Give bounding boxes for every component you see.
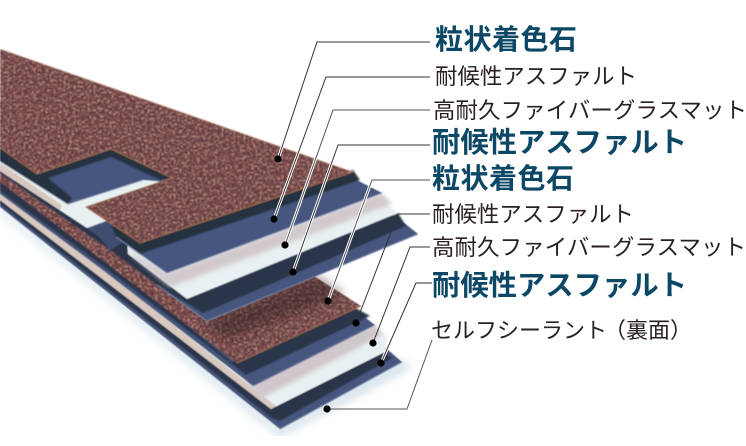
- leader line: asphalt 3: [352, 214, 430, 327]
- leader line: mineral granules 2: [324, 180, 430, 305]
- leader line: fiberglass mat 2: [369, 247, 430, 347]
- label: asphalt 4: 耐候性アスファルト: [432, 269, 687, 301]
- label: self sealant: セルフシーラント（裏面）: [431, 318, 692, 343]
- label: asphalt 3: 耐候性アスファルト: [432, 202, 634, 227]
- layer: lower asphalt: [0, 160, 375, 386]
- label: asphalt 2: 耐候性アスファルト: [432, 126, 687, 158]
- leader line: fiberglass mat 1: [281, 110, 430, 249]
- layer: upper asphalt 1: [0, 100, 382, 273]
- label: asphalt 1: 耐候性アスファルト: [435, 64, 637, 89]
- drop shadow: [0, 207, 412, 436]
- leader line: asphalt 2: [289, 145, 430, 276]
- layer: upper asphalt 2: [0, 100, 418, 321]
- label: fiberglass mat 1: 高耐久ファイバーグラスマット: [433, 98, 746, 123]
- roofing shingle layer stack: [0, 49, 418, 436]
- leader line: mineral granules 1: [274, 42, 430, 163]
- leader line: asphalt 1: [270, 77, 430, 223]
- layer: lower mineral granules: [0, 100, 361, 363]
- layer: top mineral granules: [0, 49, 353, 243]
- label: mineral granules 1: 粒状着色石: [435, 24, 577, 55]
- layer: upper fiberglass mat: [0, 100, 398, 299]
- leader line: asphalt 4: [377, 283, 432, 367]
- leader line: self sealant: [323, 340, 432, 413]
- layer: lower fiberglass mat: [0, 170, 387, 409]
- label: fiberglass mat 2: 高耐久ファイバーグラスマット: [432, 235, 746, 260]
- label: mineral granules 2: 粒状着色石: [432, 163, 574, 194]
- layer: bottom asphalt: [0, 170, 402, 429]
